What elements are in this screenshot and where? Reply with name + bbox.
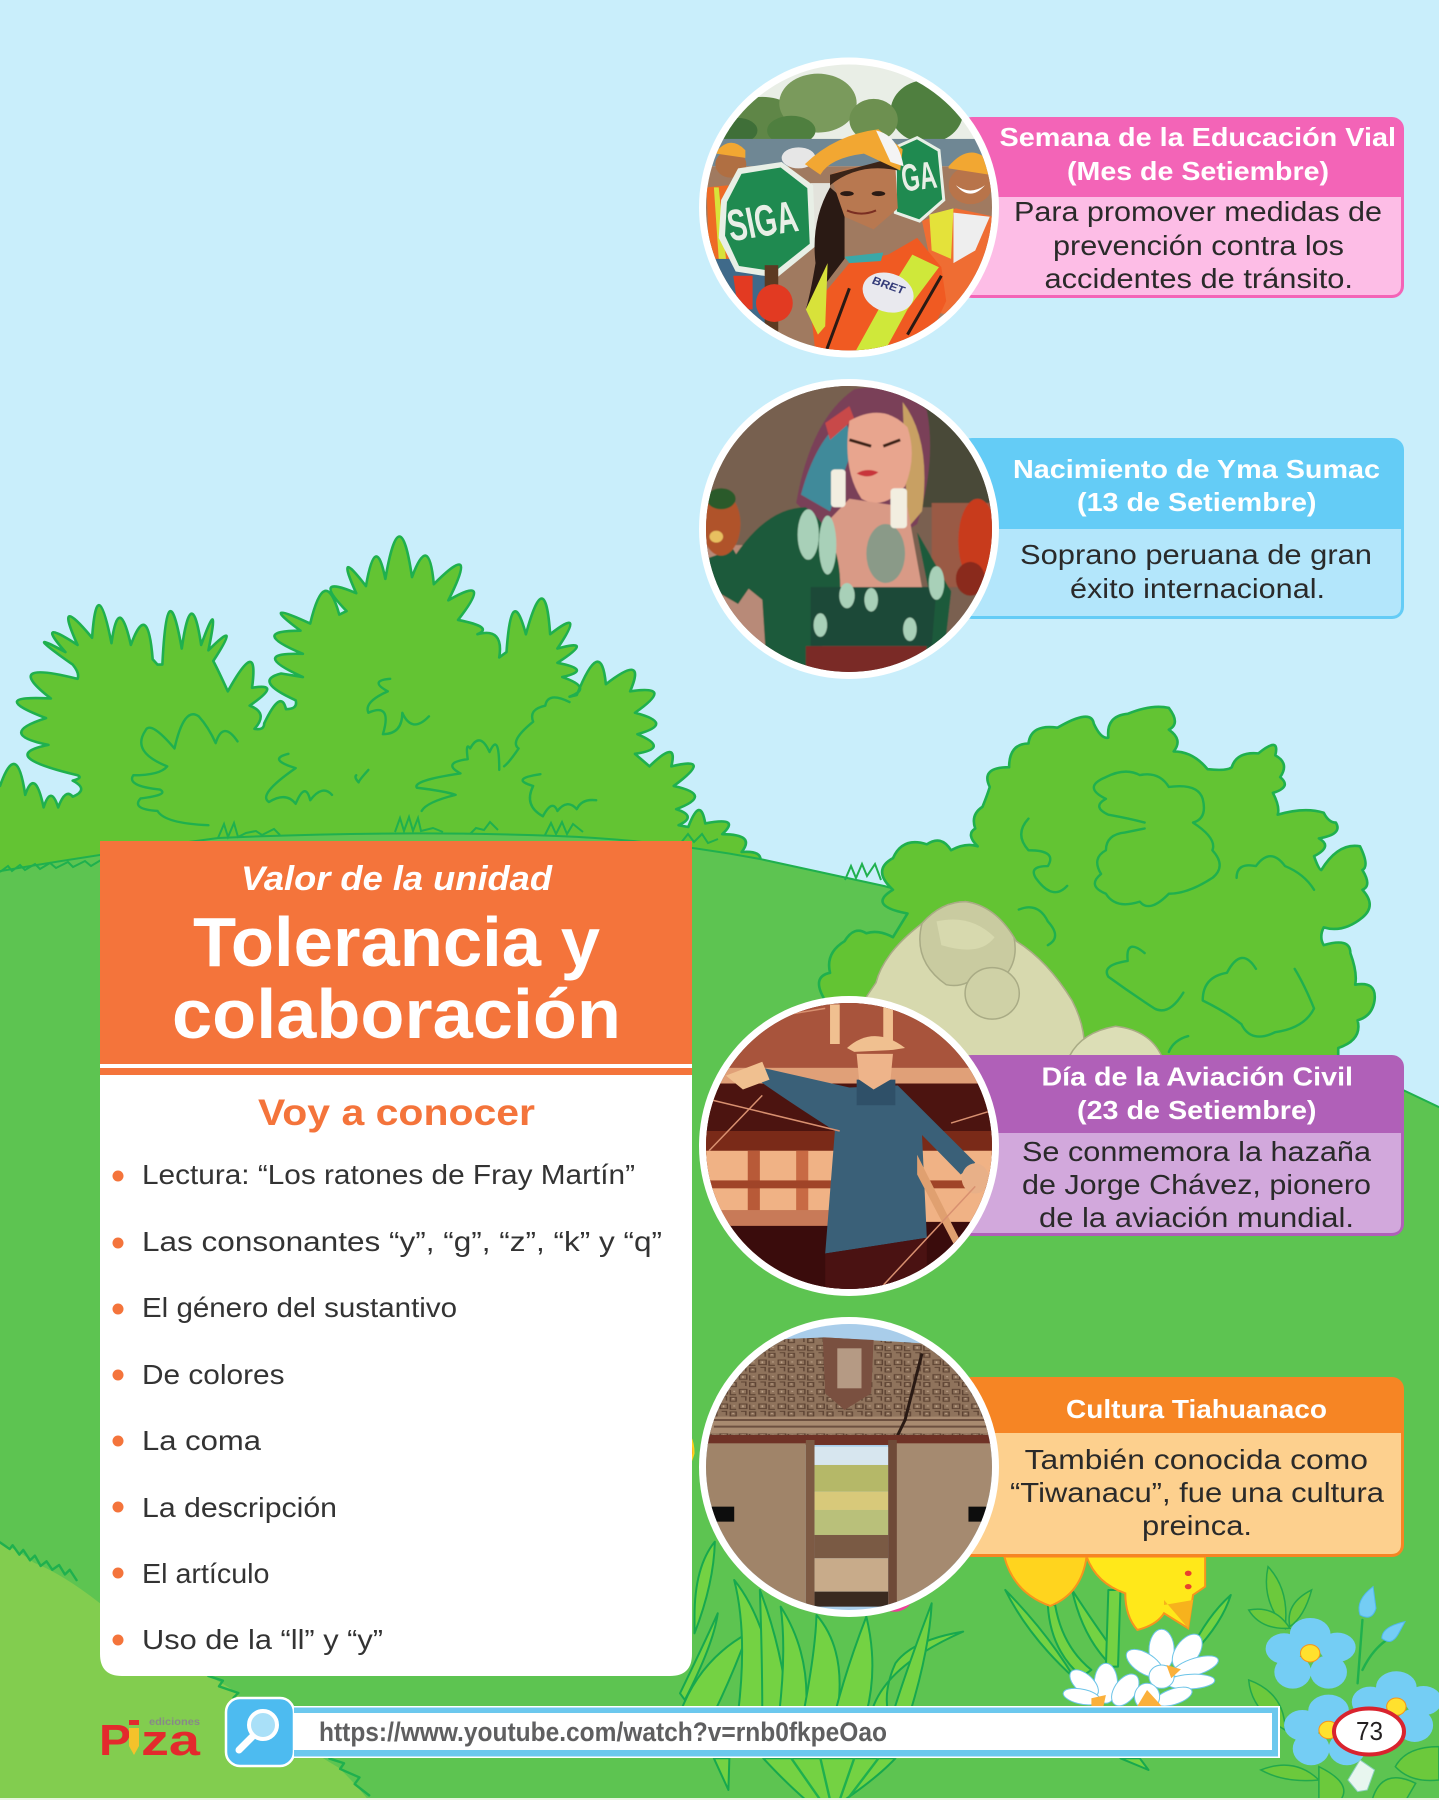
logo: ediciones Piza: za bbox=[141, 1716, 201, 1765]
panel: nacimiento de yma sumac: Soprano peruana de gran bbox=[1020, 539, 1372, 570]
panel: semana de la educación vial bbox=[960, 117, 1404, 298]
panel: nacimiento de yma sumac bbox=[960, 438, 1404, 619]
photo: niñas con señal SIGA: SIGA bbox=[723, 192, 802, 251]
illustration: yellow tulip and daffodil bbox=[1004, 1557, 1231, 1678]
panel: día de la aviación civil: de Jorge Chávez, pionero bbox=[1022, 1169, 1371, 1200]
illustration: ground hill bbox=[0, 833, 1439, 1800]
panel: cultura tiahuanaco: Cultura Tiahuanaco bbox=[1066, 1394, 1327, 1424]
panel: nacimiento de yma sumac: Nacimiento de Yma Sumac bbox=[1013, 454, 1380, 484]
panel: semana de la educación vial: accidentes de tránsito. bbox=[1044, 263, 1353, 294]
logo: ediciones Piza: P bbox=[99, 1716, 131, 1765]
panel: día de la aviación civil: de la aviación mundial. bbox=[1039, 1202, 1354, 1233]
panel: día de la aviación civil: Día de la Aviación Civil bbox=[1042, 1062, 1353, 1092]
page number bbox=[1334, 1708, 1404, 1754]
heading: voy a conocer: Voy a conocer bbox=[258, 1092, 535, 1133]
panel: nacimiento de yma sumac: (13 de Setiembre) bbox=[1077, 487, 1316, 517]
photo: Puerta del Sol, Tiahuanaco bbox=[699, 1317, 999, 1617]
panel: nacimiento de yma sumac: éxito internacional. bbox=[1070, 573, 1325, 604]
stripe bbox=[100, 1068, 692, 1075]
photo: niñas con señal SIGA bbox=[699, 58, 999, 358]
illustration: right bush bbox=[819, 707, 1375, 1080]
url bar bbox=[294, 1706, 1280, 1758]
photo: niñas con señal SIGA: GA bbox=[898, 153, 939, 200]
panel: cultura tiahuanaco: “Tiwanacu”, fue una cultura bbox=[1010, 1477, 1384, 1508]
logo: ediciones Piza: ediciones bbox=[149, 1717, 200, 1728]
logo: ediciones Piza bbox=[99, 1716, 201, 1765]
illustration: white daisies bbox=[1060, 1629, 1223, 1710]
photo: niñas con señal SIGA: BRET bbox=[870, 275, 908, 297]
title line 1: Tolerancia y bbox=[193, 903, 600, 981]
panel: semana de la educación vial: prevención contra los bbox=[1053, 230, 1344, 261]
list of topics: La coma bbox=[142, 1425, 261, 1456]
list of topics: Las consonantes “y”, “g”, “z”, “k” y “q” bbox=[142, 1226, 662, 1257]
panel: día de la aviación civil: (23 de Setiembre) bbox=[1077, 1095, 1316, 1125]
panel: valor de la unidad bbox=[100, 841, 692, 1676]
list of topics: De colores bbox=[142, 1359, 284, 1390]
illustration: rocks bbox=[864, 902, 1162, 1056]
url bar: https://www.youtube.com/watch?v=rnb0fkpeOao bbox=[319, 1717, 887, 1747]
illustration: grass and leaves bbox=[678, 1427, 1439, 1800]
list of topics bbox=[112, 1159, 662, 1655]
panel: cultura tiahuanaco: preinca. bbox=[1142, 1510, 1252, 1541]
photo: Jorge Chávez bbox=[699, 996, 999, 1296]
list of topics: Uso de la “ll” y “y” bbox=[142, 1624, 383, 1655]
subtitle: Valor de la unidad bbox=[241, 860, 553, 898]
illustration: light hill bottom left bbox=[0, 1540, 373, 1800]
panel: cultura tiahuanaco: También conocida como bbox=[1025, 1444, 1368, 1475]
list of topics: La descripción bbox=[142, 1492, 337, 1523]
list of topics: El artículo bbox=[142, 1558, 270, 1589]
panel: día de la aviación civil bbox=[960, 1055, 1404, 1236]
illustration: grass tufts along ridge bbox=[0, 817, 881, 880]
photo: Yma Sumac bbox=[699, 379, 999, 679]
header band orange bbox=[100, 841, 692, 1064]
page number: 73 bbox=[1356, 1716, 1383, 1746]
panel body white bbox=[100, 1064, 692, 1676]
panel: día de la aviación civil: Se conmemora la hazaña bbox=[1022, 1136, 1371, 1167]
panel: semana de la educación vial: Semana de la Educación Vial bbox=[1000, 122, 1396, 152]
illustration: blue flowers and leaves bbox=[1249, 1567, 1439, 1800]
panel: semana de la educación vial: (Mes de Setiembre) bbox=[1067, 156, 1329, 186]
list of topics: El género del sustantivo bbox=[142, 1292, 457, 1323]
list of topics: Lectura: “Los ratones de Fray Martín” bbox=[142, 1159, 635, 1190]
icon: magnifying glass bbox=[226, 1698, 294, 1766]
illustration: left bush bbox=[0, 537, 760, 913]
title line 2: colaboración bbox=[172, 975, 621, 1053]
panel: semana de la educación vial: Para promover medidas de bbox=[1014, 196, 1382, 227]
panel: cultura tiahuanaco bbox=[960, 1377, 1404, 1557]
